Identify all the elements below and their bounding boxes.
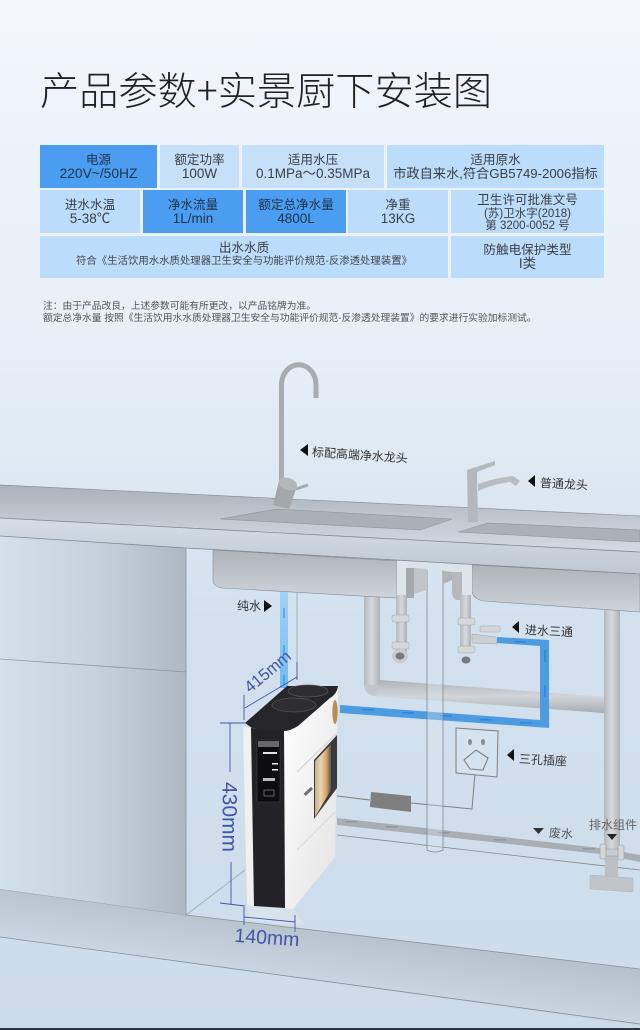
- sink openings: [220, 509, 640, 542]
- cell: flow rate: 净水流量: [168, 198, 218, 212]
- footnote: [43, 300, 536, 324]
- label: regular faucet: 普通龙头: [540, 476, 588, 493]
- cell: shock protection: I类: [519, 256, 536, 271]
- cell: hygiene licence: (苏)卫水字(2018): [484, 208, 571, 220]
- cell: water pressure: [242, 145, 384, 188]
- dimension 140mm: 140mm: [234, 925, 300, 951]
- cell: power supply: 电源: [86, 153, 111, 167]
- cell: hygiene licence: 卫生许可批准文号: [477, 193, 578, 207]
- specification table: [40, 145, 604, 278]
- dimension 415mm: 415mm: [241, 647, 295, 697]
- label: waste water: 废水: [549, 825, 573, 841]
- inlet water pipe: [340, 637, 549, 728]
- cell: inlet temperature: 5-38℃: [70, 211, 110, 226]
- label: faucet: 标配高端净水龙头: [312, 444, 408, 466]
- cell: total capacity: 额定总净水量: [258, 198, 334, 212]
- left cabinet: [0, 536, 245, 915]
- sink drain valves: [392, 595, 500, 664]
- cell: total capacity: [246, 190, 346, 233]
- cell: flow rate: 1L/min: [173, 211, 213, 226]
- cell: raw water: 适用原水: [470, 153, 521, 167]
- cell: shock protection: [451, 236, 604, 278]
- power cord and transformer: [337, 773, 475, 812]
- cell: water pressure: 0.1MPa～0.35MPa: [256, 166, 370, 181]
- standard purified water faucet: [273, 365, 316, 509]
- cell: water pressure: 适用水压: [288, 153, 338, 167]
- unit black front strip: [251, 728, 285, 908]
- cell: power supply: [40, 145, 157, 188]
- bottom edge strip: [0, 1028, 640, 1030]
- drain assembly: [590, 844, 633, 892]
- cell: inlet temperature: [40, 190, 140, 233]
- dimension 430mm: 430mm: [218, 782, 240, 852]
- pure water pipe: [280, 590, 297, 688]
- cell: net weight: 净重: [385, 198, 411, 212]
- waste water pipe: [337, 818, 640, 862]
- cell: raw water: 市政自来水,符合GB5749-2006指标: [393, 166, 598, 181]
- unit left white strip: [243, 727, 254, 906]
- label: socket: 三孔插座: [519, 751, 567, 769]
- unit side panel: [284, 687, 338, 909]
- regular faucet: [467, 461, 520, 522]
- unit side badge: [332, 700, 338, 724]
- cell: raw water: [387, 145, 604, 188]
- drain pipe: [364, 590, 620, 860]
- label: pure water: [237, 599, 272, 613]
- cell: total capacity: 4800L: [277, 211, 315, 226]
- label: drain assembly: 排水组件: [589, 818, 637, 832]
- dimension 415mm: [241, 647, 297, 720]
- cell: net weight: [348, 190, 448, 233]
- title: 产品参数+实景厨下安装图: [40, 61, 492, 117]
- cell: water quality: [40, 236, 448, 278]
- label: pure water: 纯水: [237, 599, 261, 613]
- unit black top: [245, 685, 338, 731]
- cell: flow rate: [143, 190, 243, 233]
- wall pipe line: [337, 835, 640, 870]
- cell: rated power: 额定功率: [174, 153, 225, 167]
- cell: rated power: [160, 145, 239, 188]
- cell: water quality: 出水水质: [219, 241, 269, 255]
- support column: [427, 570, 443, 852]
- countertop: [0, 485, 640, 574]
- cell: hygiene licence: [451, 190, 604, 233]
- cell: net weight: 13KG: [381, 211, 415, 226]
- floor band: [0, 889, 640, 1026]
- dimension 140mm: [234, 907, 300, 951]
- cell: rated power: 100W: [182, 166, 217, 181]
- label: inlet tee: 进水三通: [525, 623, 573, 640]
- unit display: [257, 740, 280, 802]
- cell: power supply: 220V~/50HZ: [60, 166, 137, 181]
- dimension 430mm: [218, 723, 245, 906]
- label: waste water: [533, 825, 573, 841]
- label: drain assembly: [589, 818, 637, 840]
- unit shadow: [247, 905, 305, 925]
- unit side logo: [304, 787, 313, 796]
- unit side window: [297, 733, 337, 850]
- purifier unit: [243, 685, 338, 925]
- footnote: 额定总净水量 按照《生活饮用水水质处理器卫生安全与功能评价规范-反渗透处理装置》的要求进行实验加标测试。: [43, 313, 536, 324]
- cell: shock protection: 防触电保护类型: [483, 243, 572, 257]
- footnote: 注：由于产品改良，上述参数可能有所更改，以产品铭牌为准。: [43, 301, 316, 312]
- label: socket: [507, 749, 567, 769]
- wall socket: [456, 728, 498, 777]
- cell: water quality: 符合《生活饮用水水质处理器卫生安全与功能评价规范-反渗透处理装置》: [76, 256, 412, 267]
- under-sink bowls: [213, 550, 640, 612]
- cell: hygiene licence: 第 3200-0052 号: [485, 220, 570, 232]
- cell: inlet temperature: 进水水温: [65, 198, 115, 212]
